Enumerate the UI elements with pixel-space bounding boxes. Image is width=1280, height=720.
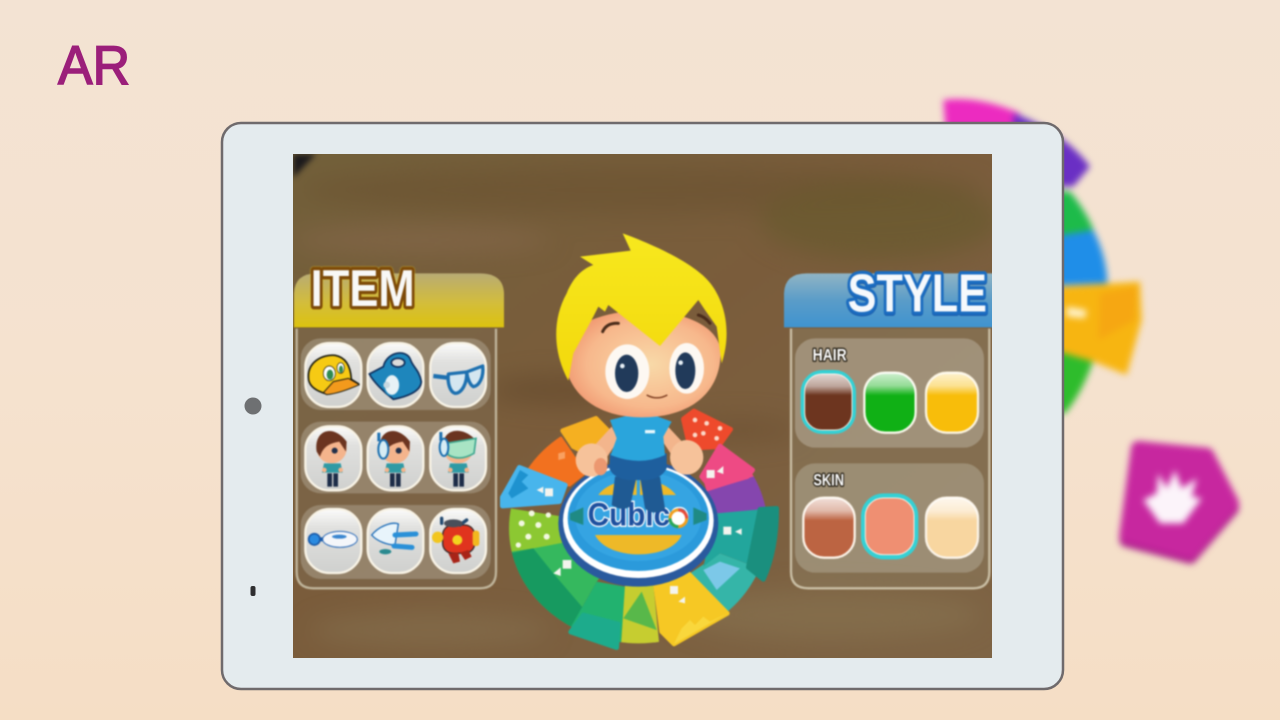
title: AR — [58, 34, 130, 96]
protruding wedges — [502, 411, 777, 648]
icon: glasses — [433, 366, 483, 393]
AR screen — [290, 150, 1000, 687]
character shorts — [609, 453, 667, 480]
style panel frame — [791, 329, 989, 588]
hair swatch: green — [864, 373, 916, 433]
icon: blaster — [372, 523, 416, 554]
icon: boy — [316, 431, 347, 487]
skin swatch: light — [926, 498, 978, 558]
skin swatch: dark — [803, 498, 855, 558]
tablet camera — [244, 398, 262, 414]
tablet body — [222, 123, 1063, 689]
skin row — [795, 463, 984, 573]
icon: boy with headset — [377, 431, 410, 487]
character head — [564, 311, 721, 417]
skin swatch: medium selected — [861, 493, 918, 559]
hair swatch: brown selected — [801, 370, 856, 434]
logo ball — [670, 510, 687, 527]
icon: disc gadget — [309, 531, 357, 547]
hair label: HAIR — [813, 345, 847, 364]
skin label: SKIN — [813, 470, 844, 489]
tablet — [222, 123, 1063, 689]
marker hub — [558, 460, 718, 587]
hair row — [795, 338, 984, 448]
icon: red robot — [432, 518, 479, 563]
icon: duck cap — [308, 355, 359, 395]
character eyebrows — [603, 315, 710, 332]
character arms and hands — [576, 423, 703, 477]
hair swatch: yellow — [926, 373, 978, 433]
style header — [784, 273, 993, 327]
panel: item — [294, 260, 504, 588]
character legs — [612, 477, 665, 512]
character shirt — [610, 415, 672, 461]
item header — [294, 273, 504, 327]
character on marker — [473, 233, 790, 687]
decorative hand icon badge — [1127, 448, 1232, 556]
panel: style — [784, 264, 993, 588]
wood table background — [290, 150, 1000, 662]
colour wheel marker — [499, 408, 780, 651]
heading: style: STYLE — [848, 264, 987, 323]
icon: headphones — [369, 353, 421, 399]
tablet home sensor — [250, 586, 256, 596]
decorative colour wheel behind tablet — [943, 99, 1142, 413]
heading: item: ITEM — [311, 260, 415, 318]
item buttons — [305, 343, 486, 573]
character mouth — [647, 395, 667, 398]
character hair — [556, 233, 727, 381]
icon: boy with visor — [439, 431, 476, 487]
logo text: Cubico — [588, 496, 688, 532]
character eyes — [605, 343, 704, 399]
item panel frame — [297, 329, 496, 588]
item rows — [301, 338, 491, 579]
wheel disc segments — [508, 436, 766, 644]
